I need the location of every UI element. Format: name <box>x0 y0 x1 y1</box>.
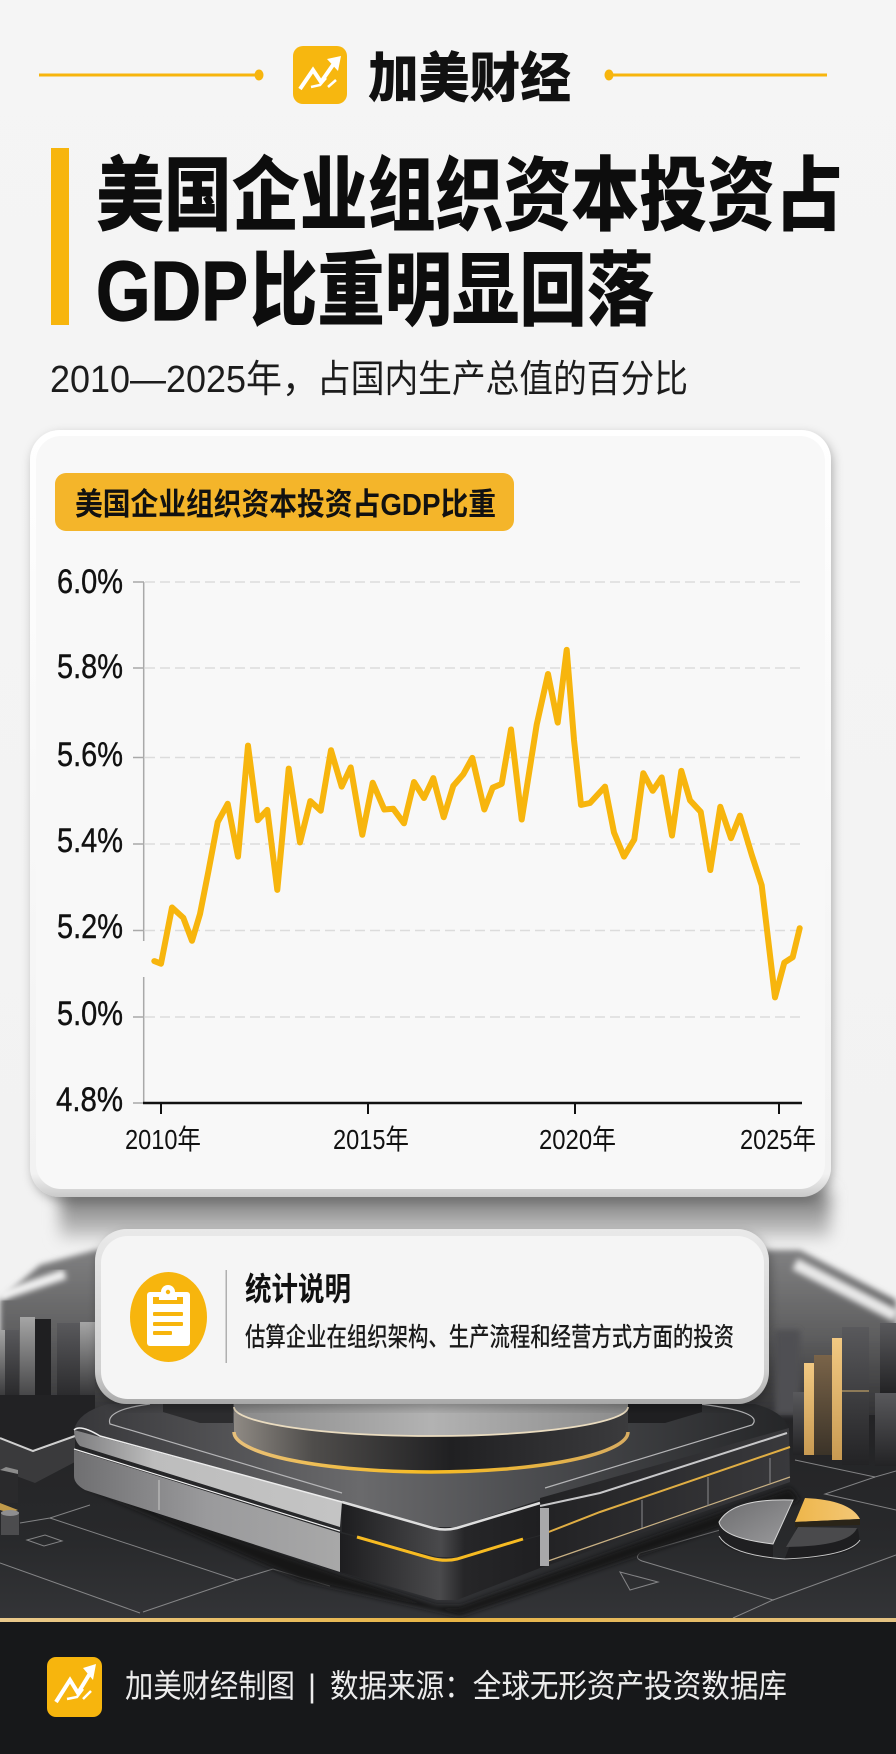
x axis <box>143 1103 802 1114</box>
chart heading badge: 美国企业组织资本投资占GDP比重 <box>75 487 496 522</box>
y axis labels: 5.2% <box>57 908 123 946</box>
y axis labels: 4.8% <box>56 1081 123 1119</box>
y axis labels: 5.6% <box>57 736 123 774</box>
gridlines <box>145 582 803 1017</box>
x axis labels: 2020年 <box>539 1124 616 1155</box>
chart heading badge <box>55 473 514 531</box>
floor grid lines <box>0 1460 896 1618</box>
y axis <box>133 582 144 1103</box>
icon: clipboard <box>130 1272 207 1362</box>
right header rule <box>604 70 827 80</box>
title: GDP <box>96 244 248 338</box>
y axis labels: 5.8% <box>57 648 123 686</box>
footer credit text: | <box>308 1668 316 1704</box>
pie chart model <box>719 1498 860 1560</box>
title accent bar <box>51 148 69 325</box>
small cubes <box>0 1467 19 1535</box>
note heading: 统计说明 <box>245 1271 351 1307</box>
panel: statistics note callout <box>95 1229 769 1404</box>
platform inner groove <box>110 1404 754 1493</box>
footer credit text: 数据来源：全球无形资产投资数据库 <box>330 1668 787 1704</box>
front corner block <box>340 1502 549 1600</box>
footer <box>0 1618 896 1754</box>
header brand row <box>39 46 827 109</box>
line chart <box>56 563 816 1155</box>
subtitle <box>50 359 688 401</box>
data line <box>154 650 800 997</box>
y axis labels: 5.0% <box>57 995 123 1033</box>
footer credit text: 加美财经制图 <box>125 1668 295 1704</box>
x axis labels <box>125 1124 816 1155</box>
footer credit text <box>125 1668 787 1704</box>
central platform <box>74 1404 800 1616</box>
title <box>96 152 843 338</box>
rear bases <box>163 1404 702 1423</box>
floor <box>0 1415 896 1619</box>
right bar cluster <box>775 1323 896 1466</box>
x axis labels: 2025年 <box>740 1124 816 1155</box>
central cylinder <box>234 1404 628 1472</box>
left upper silver band <box>74 1430 342 1527</box>
subtitle: 2010—2025年， <box>50 359 318 401</box>
left small plinth <box>0 1395 95 1483</box>
note text: 估算企业在组织架构、生产流程和经营方式方面的投资 <box>245 1322 734 1352</box>
x axis labels: 2010年 <box>125 1124 201 1155</box>
brand logo icon <box>293 46 347 104</box>
left bar cluster <box>0 1317 95 1414</box>
title: 比重明显回落 <box>250 247 654 337</box>
footer logo icon <box>47 1657 102 1717</box>
platform top face <box>74 1404 789 1527</box>
platform shadow <box>74 1482 800 1616</box>
left lower silver band <box>74 1450 340 1572</box>
y axis labels <box>56 563 123 1119</box>
3D scene backdrop <box>0 1190 896 1619</box>
x axis labels: 2015年 <box>333 1124 409 1155</box>
right side panel <box>540 1428 790 1568</box>
brand name: 加美财经 <box>368 49 571 109</box>
y axis labels: 6.0% <box>57 563 123 601</box>
panel: chart card <box>30 430 831 1197</box>
subtitle: 占国内生产总值的百分比 <box>317 359 688 401</box>
y axis labels: 5.4% <box>57 822 123 860</box>
blurred back wall <box>0 1190 896 1430</box>
left header rule <box>39 70 264 80</box>
